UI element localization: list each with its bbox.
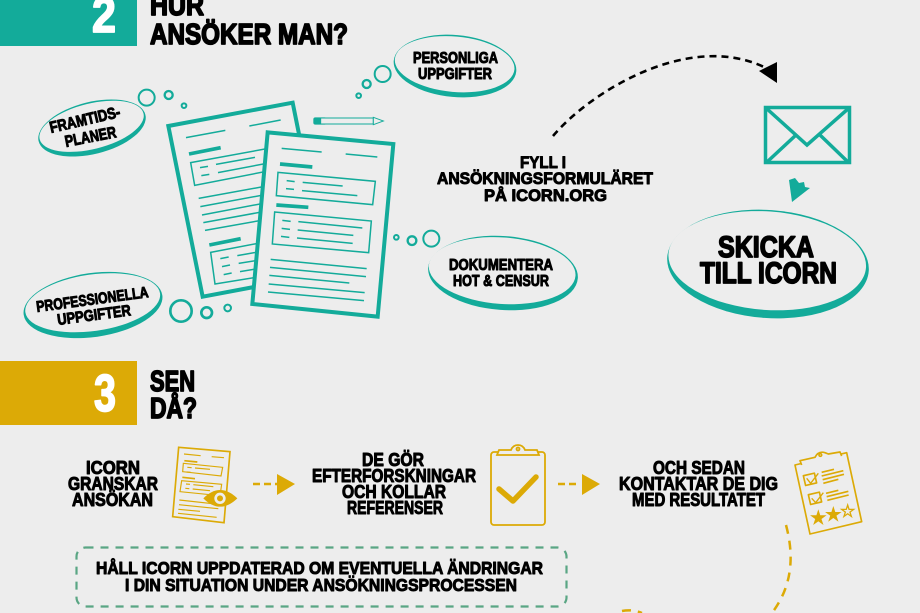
callout: dokumentera hot och censur: DOKUMENTERA	[449, 257, 553, 274]
callout: keep icorn updated: I DIN SITUATION UNDER ANSÖKNINGSPROCESSEN	[125, 575, 517, 595]
section 2 heading	[150, 0, 348, 51]
step 1 text: ANSÖKAN	[72, 490, 153, 510]
icon: clipboard with check mark	[491, 445, 545, 525]
icon: application forms	[168, 103, 393, 317]
callout: personliga uppgifter: UPPGIFTER	[418, 66, 492, 83]
dashed arrow to envelope	[553, 56, 777, 136]
callout: skicka till icorn: SKICKA	[718, 231, 814, 264]
icon: clipboard with checklist and stars	[795, 452, 862, 534]
instruction text: fill in form	[437, 153, 654, 205]
section 3 heading: SEN	[150, 366, 195, 398]
icon: document with eye	[173, 447, 237, 523]
step 3 text: OCH SEDAN	[653, 458, 745, 478]
step 1 text	[68, 458, 158, 510]
callout: framtidsplaner: PLANER	[64, 124, 118, 151]
teal arrow down to send bubble	[789, 178, 810, 202]
section 2 number banner	[0, 0, 137, 46]
step 3 text: MED RESULTATET	[632, 490, 765, 510]
rear form	[168, 103, 327, 297]
instruction text: fill in form: ANSÖKNINGSFORMULÄRET	[437, 169, 654, 188]
step 1 text: GRANSKAR	[68, 474, 158, 494]
callout: keep icorn updated	[76, 548, 566, 606]
callout: dokumentera hot och censur	[394, 231, 580, 315]
callout: professionella uppgifter: PROFESSIONELLA	[35, 284, 150, 316]
step 2 text: OCH KOLLAR	[342, 482, 446, 502]
instruction text: fill in form: FYLL I	[520, 153, 566, 172]
callout: keep icorn updated: HÅLL ICORN UPPDATERAD OM EVENTUELLA ÄNDRINGAR	[96, 558, 543, 578]
callout: skicka till icorn: TILL ICORN	[700, 257, 837, 290]
section 3 number banner	[0, 361, 137, 425]
callout: professionella uppgifter	[19, 264, 231, 346]
step 2 text	[312, 450, 476, 518]
front form	[252, 132, 393, 317]
arrow: step 2 to step 3	[558, 474, 600, 495]
instruction text: fill in form: PÅ ICORN.ORG	[484, 186, 607, 205]
step 2 text: REFERENSER	[347, 498, 443, 518]
step 3 text: KONTAKTAR DE DIG	[619, 474, 778, 494]
step 1 text: ICORN	[86, 458, 140, 478]
step 2 text: EFTERFORSKNINGAR	[312, 466, 476, 486]
section 3 heading	[150, 366, 197, 425]
callout: professionella uppgifter: UPPGIFTER	[56, 302, 132, 329]
callout: skicka till icorn	[663, 203, 873, 325]
icon: envelope	[766, 108, 850, 162]
step 3 text	[619, 458, 778, 510]
icon: pencil	[313, 117, 383, 125]
step 2 text: DE GÖR	[362, 450, 424, 470]
dashed curve to next step	[622, 525, 791, 613]
callout: framtidsplaner: FRAMTIDS-	[48, 104, 122, 137]
callout: dokumentera hot och censur: HOT & CENSUR	[453, 273, 549, 290]
callout: personliga uppgifter: PERSONLIGA	[413, 50, 498, 67]
section 3 heading: DÅ?	[150, 392, 197, 425]
section 2 heading: ANSÖKER MAN?	[150, 18, 348, 51]
section 3 number banner: 3	[94, 365, 116, 423]
arrow: step 1 to step 2	[253, 474, 295, 495]
callout: framtidsplaner	[32, 89, 186, 167]
callout: personliga uppgifter	[356, 30, 519, 102]
